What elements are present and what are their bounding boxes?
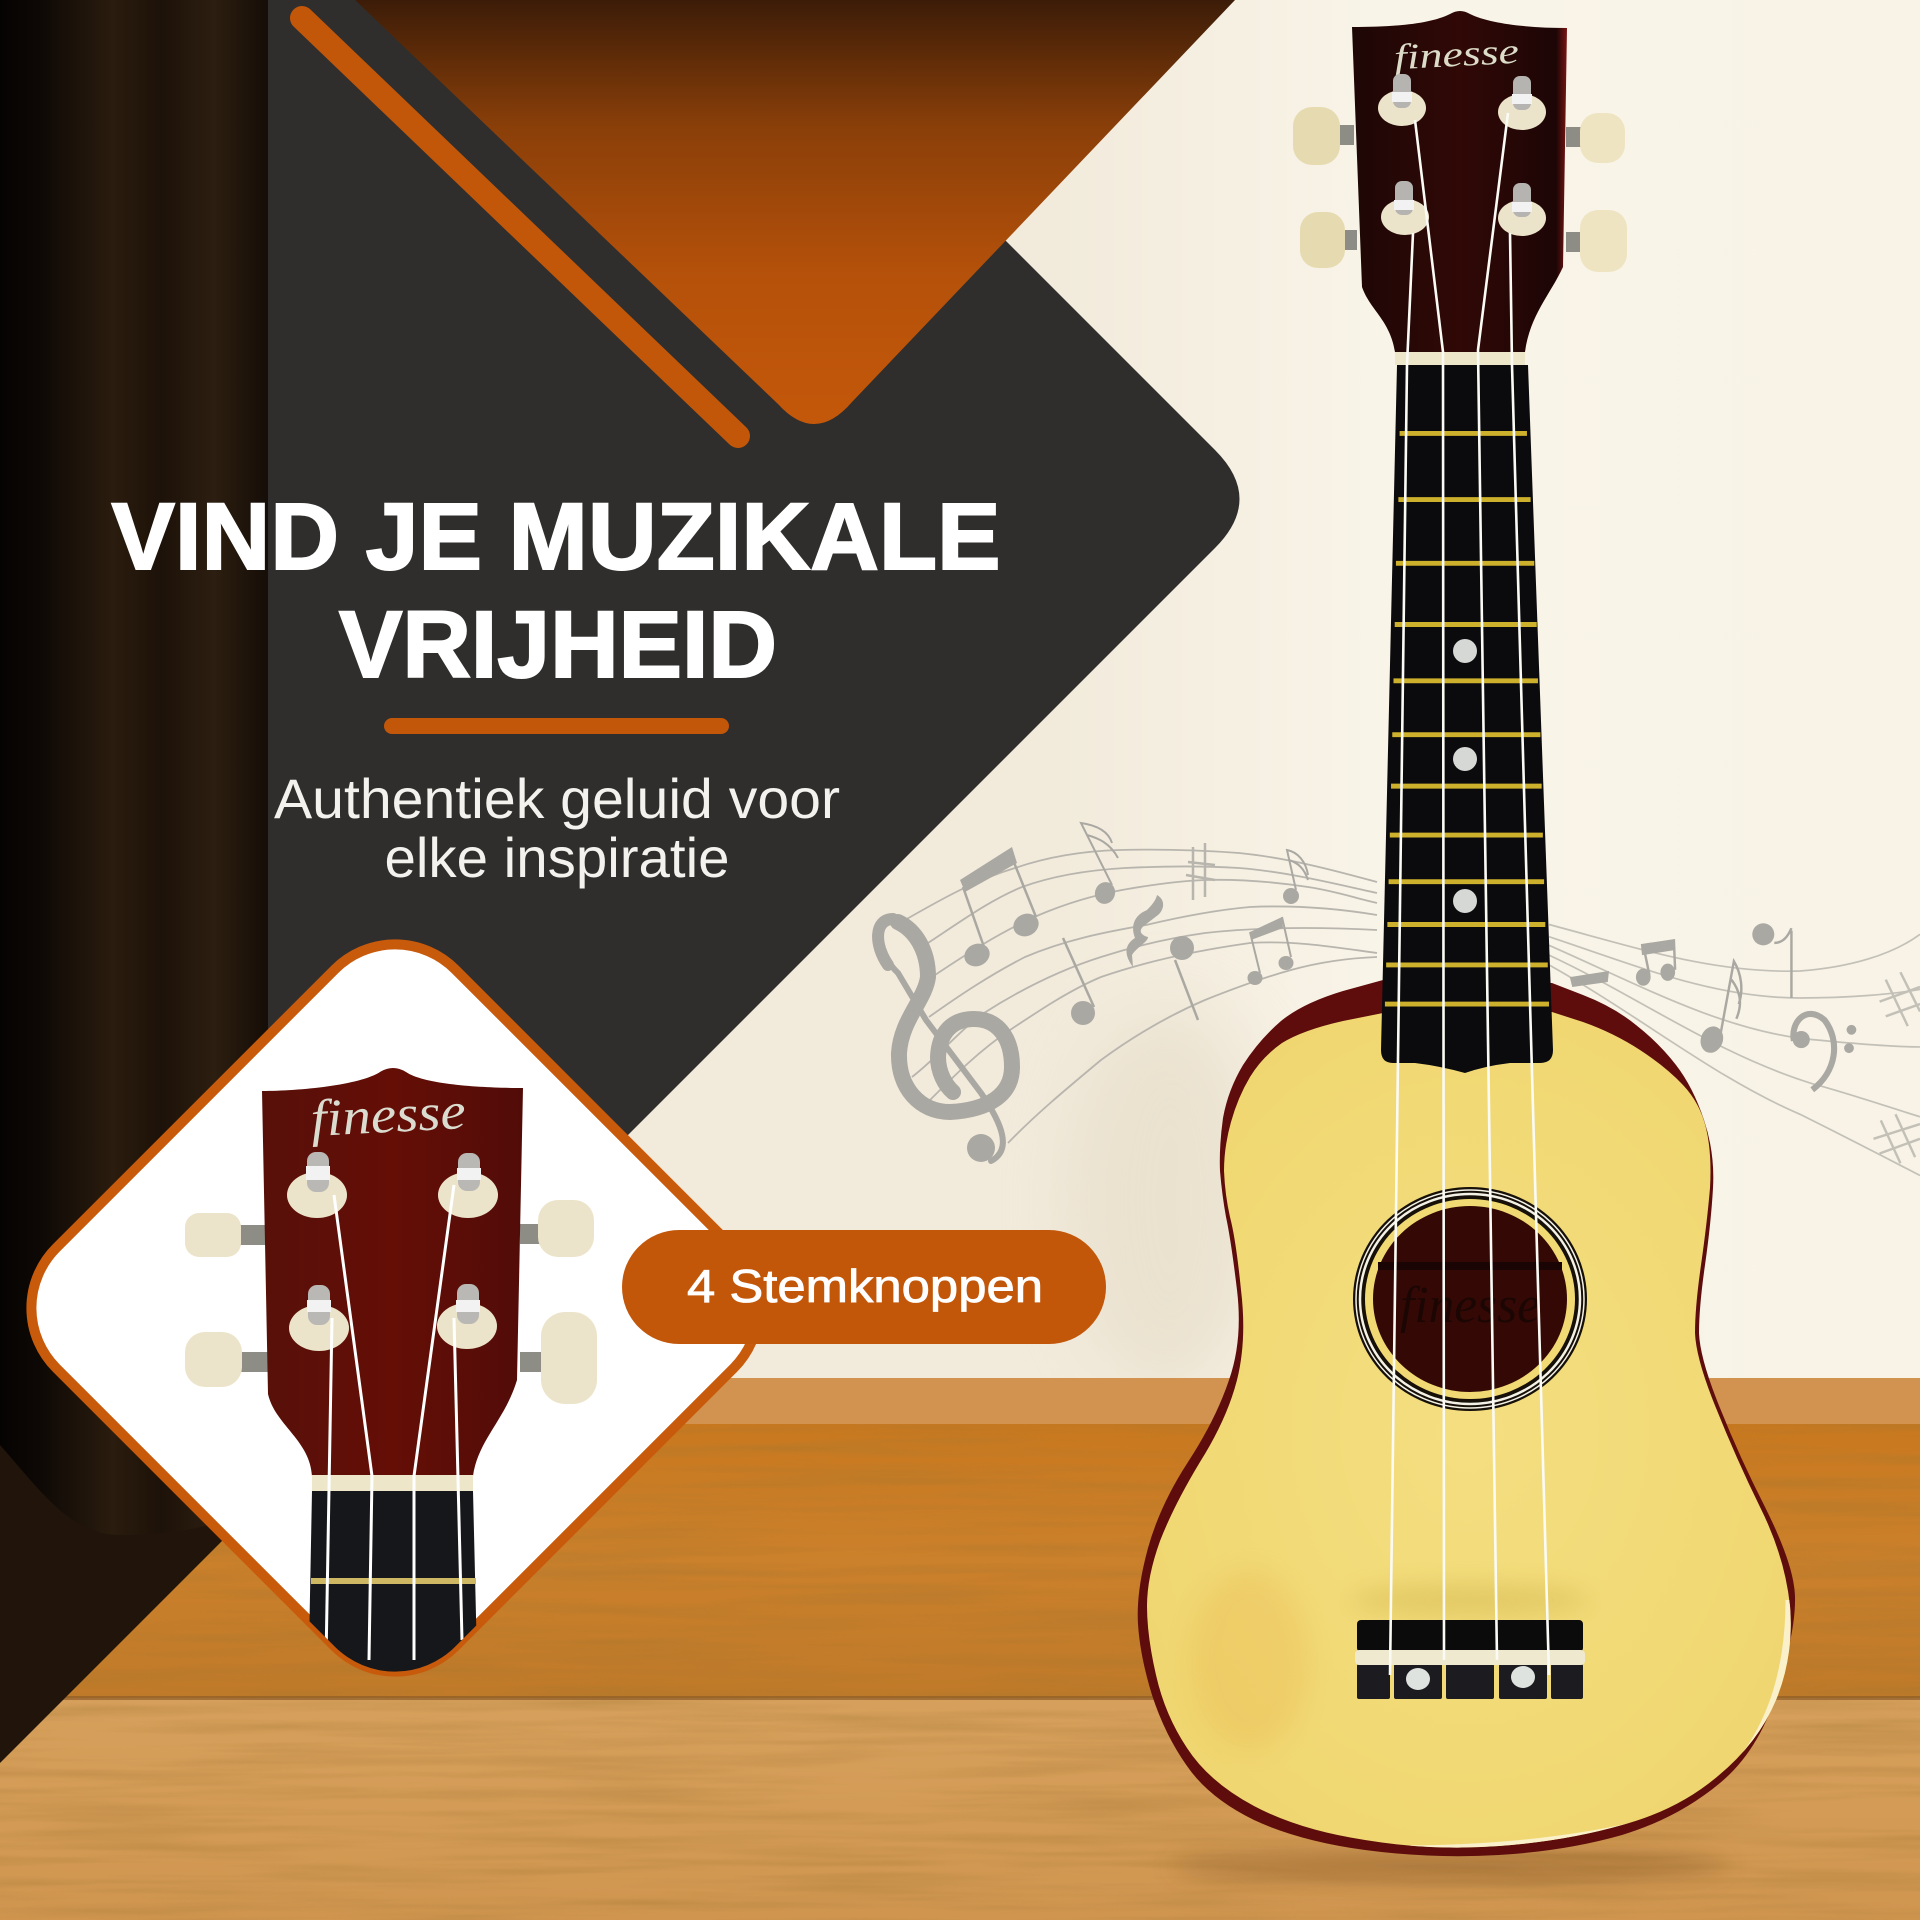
music notes right: [1570, 923, 1920, 1163]
wall background: [0, 0, 1920, 1400]
inset strings: [326, 1185, 462, 1660]
wall shadow behind ukulele: [1070, 1000, 1270, 1400]
tuning buttons: [1293, 107, 1627, 272]
wooden floor: [0, 1696, 1920, 1920]
dark lower-left floor shadow: [0, 1400, 300, 1763]
orange diagonal stripe: [302, 18, 738, 436]
curtain: [0, 0, 268, 1535]
fret markers: [1453, 639, 1477, 913]
subtitle: Authentiek geluid voor: [274, 767, 840, 830]
inset fret: [311, 1578, 476, 1584]
ukulele: [1130, 11, 1810, 1860]
fretboard: [1381, 365, 1553, 1073]
title: VRIJHEID: [339, 592, 777, 698]
title: [112, 484, 1000, 698]
label pill: [622, 1230, 1106, 1344]
music staff right: [1549, 923, 1920, 1176]
inset: headstock detail: [26, 939, 756, 1677]
sound hole: finesse: [1400, 1277, 1540, 1334]
strings: [1390, 113, 1549, 1675]
frets: [1385, 433, 1549, 1004]
inset tuning posts: [287, 1152, 498, 1351]
music notes left: [960, 823, 1308, 1025]
nut: [1395, 352, 1525, 365]
treble clef: [878, 918, 1012, 1162]
skirting board: [0, 1378, 1920, 1698]
inset tuning buttons: [185, 1200, 597, 1404]
title: VIND JE MUZIKALE: [112, 484, 1000, 590]
shadow under ukulele: [1170, 1852, 1730, 1880]
inset nut: [312, 1475, 473, 1491]
inset finesse logo: finesse: [309, 1083, 467, 1148]
inset fretboard: [310, 1491, 476, 1672]
music staff left: [878, 823, 1377, 1162]
subtitle: elke inspiratie: [384, 826, 730, 889]
title underline: [384, 718, 729, 734]
tuning posts: [1378, 74, 1546, 236]
ukulele body face: [1130, 1000, 1810, 1860]
sound hole: [1353, 1187, 1587, 1411]
inset headstock shape: [262, 1068, 523, 1476]
orange top shape: [355, 0, 1235, 424]
headstock: [1352, 11, 1567, 352]
subtitle: [274, 767, 840, 889]
label pill: 4 Stemknoppen: [687, 1260, 1043, 1312]
finesse logo: finesse: [1393, 31, 1520, 77]
ukulele body side: [1138, 980, 1795, 1856]
bridge: [1355, 1620, 1585, 1699]
dark diamond panel: [230, 0, 1240, 1533]
